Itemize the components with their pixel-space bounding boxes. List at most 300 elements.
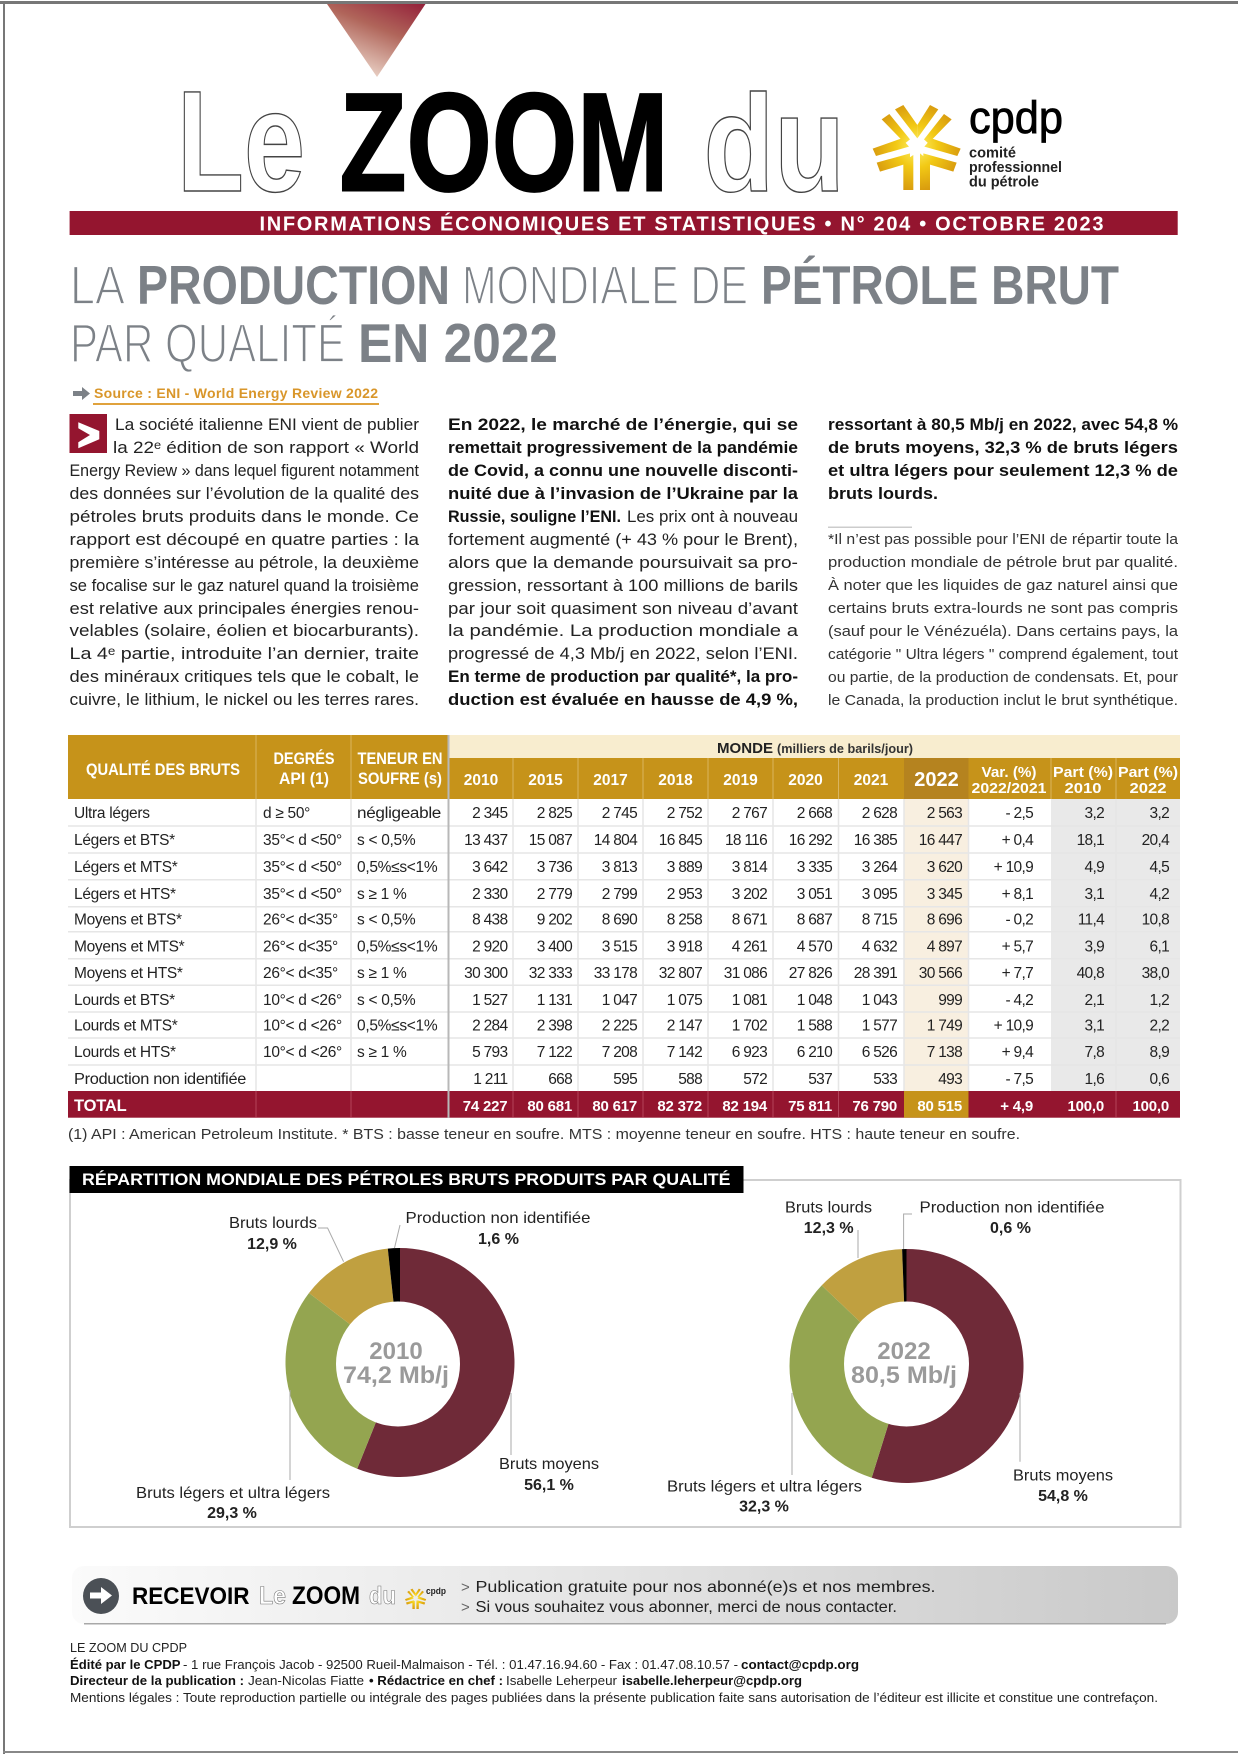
labels 2010: Bruts légers et ultra légers <box>136 1485 330 1502</box>
row: Légers et MTS <box>472 859 1169 876</box>
labels 2010: Bruts moyens <box>499 1456 599 1473</box>
row: Production non identifiée: - 7,5 <box>1005 1071 1033 1088</box>
row: Moyens et MTS: + 5,7 <box>1002 938 1033 956</box>
row: Légers et HTS: 3 095 <box>862 886 897 903</box>
row: Lourds et HTS: 6 526 <box>862 1044 897 1061</box>
footer: publication credits: contact@cpdp.org <box>741 1658 859 1672</box>
row: Production non identifiée: 572 <box>743 1071 767 1088</box>
row: Légers et BTS: 16 447 <box>919 832 962 849</box>
row: Lourds et MTS: 2 398 <box>537 1018 572 1034</box>
row: Légers et HTS <box>472 886 1169 903</box>
row: Légers et MTS: 3 620 <box>927 859 963 876</box>
row: Moyens et MTS: 4 897 <box>927 938 962 956</box>
chart: 2010 donut: 74,2 Mb/j <box>343 1362 449 1389</box>
row: Légers et HTS: 3 202 <box>732 886 767 903</box>
footnote: ou partie, de la production de condensats. Et, pour <box>828 670 1178 686</box>
row: Moyens et BTS: 11,4 <box>1078 912 1105 928</box>
row: Ultra légers: 2 752 <box>667 805 702 822</box>
row: Lourds et HTS: 6 923 <box>732 1044 767 1061</box>
row: Légers et HTS: 2 330 <box>472 886 508 903</box>
table header: Part (%) <box>1118 765 1178 781</box>
row: Production non identifiée: 1,6 <box>1085 1071 1104 1088</box>
row: Légers et HTS: 2 953 <box>667 886 702 903</box>
text column 2: fortement augmenté (+ 43 % pour le Brent), <box>448 531 798 549</box>
row: Moyens et BTS: 8 696 <box>927 912 962 928</box>
row: Production non identifiée: 588 <box>678 1071 702 1088</box>
subscription banner: Publication gratuite pour nos abonné(e)s et nos membres. <box>476 1579 936 1596</box>
text column 2: En terme de production par qualité*, la pro- <box>448 668 798 686</box>
row: Lourds et BTS: 1 527 <box>472 992 507 1009</box>
issue banner: INFORMATIONS ÉCONOMIQUES ET STATISTIQUES • N° 204 • OCTOBRE 2023 <box>260 212 1104 236</box>
row labels: Légers et BTS* <box>74 832 175 849</box>
row: TOTAL: 76 790 <box>852 1098 897 1115</box>
footnote: catégorie " Ultra légers " comprend également, tout <box>828 647 1178 663</box>
table band: MONDE <box>717 740 913 757</box>
row: Moyens et BTS: 8 687 <box>797 912 832 928</box>
row: Moyens et MTS <box>472 938 1169 956</box>
row: Moyens et HTS: 27 826 <box>789 965 832 982</box>
subscription banner <box>72 1566 1178 1624</box>
labels 2022: Production non identifiée <box>920 1200 1105 1217</box>
row: Lourds et BTS: 1 081 <box>732 992 767 1009</box>
labels 2022: 12,3 % <box>804 1220 854 1237</box>
panel: donut charts <box>70 1166 1180 1527</box>
labels 2010 <box>136 1210 599 1522</box>
table header: 2022 <box>914 769 959 791</box>
row: Production non identifiée: 533 <box>873 1071 897 1088</box>
row labels: s ≥ 1 % <box>357 1044 407 1061</box>
row: Légers et HTS: 3 051 <box>797 886 832 903</box>
row: Lourds et MTS: 1 702 <box>732 1018 767 1034</box>
row labels: 0,5%≤s<1% <box>357 1018 438 1034</box>
row: Moyens et HTS: 38,0 <box>1142 965 1170 982</box>
table header: API (1) <box>279 770 329 788</box>
row: Ultra légers <box>472 805 1169 822</box>
row: Légers et MTS: 3 264 <box>862 859 898 876</box>
table header: 2015 <box>528 772 563 789</box>
labels 2022: 32,3 % <box>739 1499 789 1516</box>
row: Moyens et BTS: 8 258 <box>667 912 702 928</box>
table header: QUALITÉ DES BRUTS <box>86 760 240 779</box>
row: TOTAL: 100,0 <box>1067 1098 1104 1115</box>
chart: 2022 donut: 2022 <box>877 1338 931 1365</box>
row: TOTAL <box>74 1097 1169 1115</box>
leader lines 2010 <box>290 1225 511 1480</box>
logo: cpdp <box>873 92 1063 191</box>
row: Légers et BTS <box>464 832 1170 849</box>
row: Moyens et BTS: 8 715 <box>862 912 897 928</box>
text column 3: de bruts moyens, 32,3 % de bruts légers <box>828 439 1178 457</box>
row: Lourds et HTS: 7 138 <box>927 1044 962 1061</box>
row labels: 35°< d <50° <box>263 886 342 903</box>
footnote: À noter que les liquides de gaz naturel ainsi que <box>828 577 1178 594</box>
row: Moyens et MTS: 4 632 <box>862 938 897 956</box>
footer: publication credits: Édité par le CPDP <box>70 1657 180 1672</box>
row: Moyens et BTS: 8 438 <box>472 912 507 928</box>
row: TOTAL: + 4,9 <box>1000 1098 1033 1115</box>
table header: Var. (%) <box>982 765 1037 781</box>
labels 2022: Bruts légers et ultra légers <box>667 1479 862 1496</box>
text column 1: est relative aux principales énergies renou- <box>70 600 419 618</box>
row: TOTAL: TOTAL <box>74 1097 127 1115</box>
chart: 2022 donut: 80,5 Mb/j <box>851 1362 957 1389</box>
text column 2: Les prix ont à nouveau <box>627 508 798 526</box>
table band: MONDE: MONDE <box>717 740 773 757</box>
row: Lourds et MTS: 2 225 <box>602 1018 637 1034</box>
row: Légers et MTS: 3 889 <box>667 859 702 876</box>
source line: Source : ENI - World Energy Review 2022 <box>94 385 378 401</box>
logo: cpdp: comité <box>969 144 1016 162</box>
table header: DEGRÉS <box>274 749 334 768</box>
row: Ultra légers: 2 668 <box>797 805 832 822</box>
masthead: Le ZOOM du <box>177 61 845 222</box>
panel heading <box>70 1166 744 1193</box>
row: Lourds et HTS: 7,8 <box>1085 1044 1104 1061</box>
row labels: 35°< d <50° <box>263 832 342 849</box>
row: Production non identifiée: 1 211 <box>473 1071 507 1088</box>
row: Lourds et HTS: + 9,4 <box>1002 1044 1034 1061</box>
subscription banner: Le <box>259 1582 286 1610</box>
table header: TENEUR EN <box>358 750 442 768</box>
row labels: s < 0,5% <box>357 832 416 849</box>
row labels: Moyens et HTS* <box>74 965 183 982</box>
row: Légers et BTS: 18,1 <box>1077 832 1104 849</box>
row: Lourds et HTS: 7 208 <box>602 1044 637 1061</box>
row: Moyens et HTS: 30 300 <box>464 965 508 982</box>
text column 1: velables (solaire, éolien et biocarburants). <box>70 622 419 640</box>
row: Légers et BTS: 13 437 <box>464 832 507 849</box>
row: Lourds et BTS: 1 131 <box>537 992 572 1009</box>
icon: small cpdp star <box>405 1589 426 1609</box>
subscription banner: cpdp <box>426 1586 446 1596</box>
row: TOTAL: 100,0 <box>1132 1098 1169 1115</box>
row: Ultra légers: - 2,5 <box>1005 805 1033 822</box>
headline: PÉTROLE BRUT <box>761 254 1119 316</box>
row: Lourds et BTS: 1 075 <box>667 992 702 1009</box>
text column 1: cuivre, le lithium, le nickel ou les terres rares. <box>70 691 419 709</box>
subscription banner: > <box>461 1599 470 1616</box>
row: Légers et MTS: 3 642 <box>472 859 507 876</box>
row: TOTAL: 75 811 <box>788 1098 832 1115</box>
text column 1: se focalise sur le gaz naturel quand la troisième <box>70 577 419 595</box>
footnote: (sauf pour le Vénézuéla). Dans certains pays, la <box>828 624 1179 640</box>
row labels: 35°< d <50° <box>263 859 342 876</box>
row labels: Moyens et BTS* <box>74 912 182 928</box>
row: Moyens et MTS: 3 515 <box>602 938 637 956</box>
row: Production non identifiée: 493 <box>938 1071 962 1088</box>
row: TOTAL: 82 372 <box>657 1098 702 1115</box>
text column 2: remettait progressivement de la pandémie <box>448 439 798 457</box>
headline: LA <box>70 254 125 316</box>
row: Ultra légers: 2 825 <box>537 805 572 822</box>
issue banner <box>70 211 1178 236</box>
row labels: 10°< d <26° <box>263 992 342 1009</box>
table header: 2022 <box>1130 781 1166 797</box>
row: Moyens et MTS: 3,9 <box>1085 938 1104 956</box>
row: Moyens et HTS: 31 086 <box>724 965 767 982</box>
row: Production non identifiée: 595 <box>613 1071 637 1088</box>
text column 1: rapport est découpé en quatre parties : la <box>70 531 420 549</box>
row: Lourds et BTS: 1 047 <box>602 992 637 1009</box>
text column 2: la pandémie. La production mondiale a <box>448 622 799 640</box>
footer: publication credits: - 1 rue François Jacob - 92500 Rueil-Malmaison - Tél. : 01.47.16.94.60 - Fax : 01.47.08.10.57 - <box>183 1658 738 1672</box>
row: Moyens et MTS: 6,1 <box>1150 938 1169 956</box>
row: Lourds et HTS: 5 793 <box>472 1044 507 1061</box>
row: Lourds et BTS: 1 043 <box>862 992 897 1009</box>
row labels: 26°< d<35° <box>263 965 338 982</box>
row: Légers et MTS: + 10,9 <box>994 859 1033 876</box>
row: Moyens et BTS: 9 202 <box>537 912 572 928</box>
footnote: certains bruts extra-lourds ne sont pas compris <box>828 601 1178 617</box>
decorative triangle <box>327 4 426 77</box>
footnote: *Il n’est pas possible pour l’ENI de répartir toute la <box>828 532 1179 548</box>
row: Ultra légers: 2 628 <box>862 805 897 822</box>
row: Moyens et HTS: 32 333 <box>529 965 572 982</box>
row: Légers et HTS: 2 779 <box>537 886 572 903</box>
row: Lourds et MTS: 1 588 <box>797 1018 832 1034</box>
labels 2010: Production non identifiée <box>406 1210 591 1227</box>
row: Production non identifiée: 0,6 <box>1150 1071 1169 1088</box>
row: Légers et MTS: 4,9 <box>1085 859 1104 876</box>
table header: 2022/2021 <box>972 781 1046 797</box>
chart: 2010 donut: 2010 <box>369 1338 423 1365</box>
labels 2010: Bruts lourds <box>229 1215 317 1232</box>
text column 2: progressé de 4,3 Mb/j en 2022, selon l’ENI. <box>448 645 798 663</box>
text column 2: duction est évaluée en hausse de 4,9 %, <box>448 691 798 709</box>
headline: MONDIALE DE <box>462 254 748 316</box>
row: TOTAL: 82 194 <box>722 1098 768 1115</box>
table header <box>86 749 1178 797</box>
row labels: s < 0,5% <box>357 992 416 1009</box>
row labels: s ≥ 1 % <box>357 965 407 982</box>
text column 2: gression, ressortant à 100 millions de barils <box>448 577 798 595</box>
row: Légers et BTS: 16 292 <box>789 832 832 849</box>
row: Lourds et HTS <box>472 1044 1169 1061</box>
labels 2010: 12,9 % <box>247 1236 297 1253</box>
table header: 2020 <box>788 772 823 789</box>
footnote: production mondiale de pétrole brut par qualité. <box>828 555 1178 571</box>
row: Ultra légers: 3,2 <box>1150 805 1169 822</box>
row labels: Production non identifiée <box>74 1071 246 1088</box>
row: Légers et BTS: 16 845 <box>659 832 702 849</box>
row: Légers et HTS: 3,1 <box>1085 886 1104 903</box>
masthead: Le ZOOM du: ZOOM <box>340 64 668 220</box>
logo: cpdp: du pétrole <box>969 174 1039 191</box>
table footnote: (1) API : American Petroleum Institute. * BTS : basse teneur en soufre. MTS : moyenne teneur en soufre. HTS : haute teneur en soufre. <box>68 1127 1020 1143</box>
subscription banner: du <box>369 1582 396 1610</box>
text column 2: de Covid, a connu une nouvelle disconti- <box>448 462 798 480</box>
text column 1: Energy Review » dans lequel figurent notamment <box>70 462 419 480</box>
text column 3 <box>828 416 1178 503</box>
text column 2: par jour soit quasiment son niveau d’avant <box>448 600 798 618</box>
row labels: Légers et HTS* <box>74 886 176 903</box>
text column 1: La société italienne ENI vient de publier <box>115 416 420 434</box>
row: Légers et BTS: + 0,4 <box>1002 832 1034 849</box>
text column 2 <box>448 416 799 709</box>
text column 3: et ultra légers pour seulement 12,3 % de <box>828 462 1178 480</box>
logo: cpdp: professionnel <box>969 159 1062 176</box>
row: Ultra légers: 2 767 <box>732 805 767 822</box>
footer: publication credits: isabelle.leherpeur@cpdp.org <box>622 1674 802 1688</box>
row: Moyens et BTS: - 0,2 <box>1005 912 1033 928</box>
row: Légers et MTS: 3 813 <box>602 859 637 876</box>
row labels: Moyens et MTS* <box>74 938 185 956</box>
icon: drop cap chevron <box>70 414 107 453</box>
text column 1 <box>70 414 420 709</box>
text column 1: la 22ᵉ édition de son rapport « World <box>113 439 419 457</box>
row: TOTAL: 80 617 <box>592 1098 637 1115</box>
subscription banner: ZOOM <box>292 1582 360 1610</box>
labels 2010: 1,6 % <box>478 1231 519 1248</box>
row: Légers et BTS: 16 385 <box>854 832 897 849</box>
row: Lourds et HTS: 7 142 <box>667 1044 702 1061</box>
row labels: 0,5%≤s<1% <box>357 859 438 876</box>
text column 3: bruts lourds. <box>828 485 938 503</box>
subscription banner: RECEVOIR <box>132 1583 250 1610</box>
row: Lourds et HTS: 6 210 <box>797 1044 833 1061</box>
row: Moyens et MTS: 4 261 <box>732 938 767 956</box>
masthead: Le ZOOM du: Le <box>177 61 305 222</box>
row: Moyens et MTS: 3 400 <box>537 938 573 956</box>
row: Lourds et MTS: 2,2 <box>1150 1018 1169 1034</box>
icon: arrow in circle <box>83 1578 119 1614</box>
footnote <box>828 526 1179 709</box>
table header: 2010 <box>1064 781 1102 797</box>
row labels <box>74 805 441 1088</box>
subscription banner: > <box>461 1579 470 1596</box>
chart: 2022 donut <box>790 1249 1024 1483</box>
row: Moyens et MTS: 3 918 <box>667 938 702 956</box>
row labels: Lourds et HTS* <box>74 1044 176 1061</box>
footnote: le Canada, la production inclut le brut synthétique. <box>828 693 1178 709</box>
row labels: s ≥ 1 % <box>357 886 407 903</box>
table header: 2018 <box>658 772 693 789</box>
labels 2022: 54,8 % <box>1038 1488 1088 1505</box>
headline: PAR QUALITÉ <box>70 312 345 374</box>
table header: 2021 <box>854 772 889 789</box>
row labels: d ≥ 50° <box>263 805 310 822</box>
leader lines 2022 <box>792 1214 1020 1475</box>
row: Moyens et BTS: 10,8 <box>1142 912 1169 928</box>
row: Moyens et HTS: 33 178 <box>594 965 637 982</box>
footer: publication credits: Jean-Nicolas Fiatte <box>248 1674 364 1688</box>
icon: grey arrow <box>73 387 90 400</box>
table header: 2017 <box>593 772 628 789</box>
row: Légers et HTS: 3 345 <box>927 886 962 903</box>
row: Lourds et MTS: 1 577 <box>862 1018 897 1034</box>
text column 1: des données sur l’évolution de la qualité des <box>70 485 419 503</box>
row labels: 26°< d<35° <box>263 938 338 956</box>
row: Moyens et MTS: 4 570 <box>797 938 833 956</box>
row: Ultra légers: 3,2 <box>1085 805 1104 822</box>
footer: publication credits: Isabelle Leherpeur <box>506 1674 617 1688</box>
table header: 2010 <box>464 772 498 789</box>
row: Légers et HTS: + 8,1 <box>1002 886 1033 903</box>
text column 1: La 4ᵉ partie, introduite l’an dernier, traite <box>70 645 419 663</box>
row: Moyens et BTS <box>472 912 1169 928</box>
row: Légers et BTS: 18 116 <box>725 832 767 849</box>
row: Production non identifiée: 668 <box>548 1071 572 1088</box>
text column 2: En 2022, le marché de l’énergie, qui se <box>448 416 798 434</box>
row: Lourds et BTS: 999 <box>938 992 962 1009</box>
text column 2: Russie, souligne l’ENI. <box>448 508 621 526</box>
row: Légers et BTS: 14 804 <box>594 832 638 849</box>
text column 1: des minéraux critiques tels que le cobalt, le <box>70 668 419 686</box>
table: world production by crude quality <box>68 735 1180 1118</box>
row: Légers et MTS: 3 736 <box>537 859 572 876</box>
row: TOTAL: 74 227 <box>463 1098 507 1115</box>
row: Légers et MTS: 3 335 <box>797 859 832 876</box>
headline: PRODUCTION <box>137 254 450 316</box>
row: Lourds et MTS: 3,1 <box>1085 1018 1104 1034</box>
row labels: 26°< d<35° <box>263 912 338 928</box>
row: TOTAL: 80 515 <box>917 1098 962 1115</box>
table header: 2019 <box>723 772 758 789</box>
row: Moyens et MTS: 2 920 <box>472 938 508 956</box>
row: Lourds et MTS: 1 749 <box>927 1018 962 1034</box>
row: Lourds et BTS: 1 048 <box>797 992 832 1009</box>
row: Production non identifiée: 537 <box>808 1071 832 1088</box>
row: Lourds et MTS: 2 147 <box>667 1018 702 1034</box>
row labels: Lourds et BTS* <box>74 992 175 1009</box>
row: Ultra légers: 2 345 <box>472 805 507 822</box>
labels 2010: 56,1 % <box>524 1477 574 1494</box>
row: Légers et HTS: 4,2 <box>1150 886 1169 903</box>
row: Légers et HTS: 2 799 <box>602 886 637 903</box>
row: Légers et MTS: 4,5 <box>1150 859 1169 876</box>
row: Lourds et MTS: 2 284 <box>472 1018 508 1034</box>
masthead: Le ZOOM du: du <box>704 67 845 221</box>
table header: Part (%) <box>1053 765 1113 781</box>
footer: publication credits: Directeur de la publication : <box>70 1674 244 1688</box>
footer: publication credits: LE ZOOM DU CPDP <box>70 1641 187 1655</box>
row: Moyens et BTS: 8 690 <box>602 912 638 928</box>
row labels: 10°< d <26° <box>263 1044 342 1061</box>
text column 3: ressortant à 80,5 Mb/j en 2022, avec 54,8 % <box>828 416 1178 434</box>
row: Moyens et HTS: + 7,7 <box>1002 965 1033 982</box>
icon: cpdp star <box>873 105 961 190</box>
chart: 2010 donut <box>285 1248 514 1477</box>
footer: publication credits: Mentions légales : Toute reproduction partielle ou intégrale des pages publiées dans la présente publication faite sans autorisation de l’éditeur est illicite et constitue une contrefaçon. <box>70 1691 1158 1705</box>
row labels: 10°< d <26° <box>263 1018 342 1034</box>
row: Moyens et BTS: 8 671 <box>732 912 767 928</box>
row: Production non identifiée <box>473 1071 1169 1088</box>
row: Lourds et BTS: 2,1 <box>1085 992 1104 1009</box>
row labels: Légers et MTS* <box>74 859 178 876</box>
labels 2022 <box>667 1200 1113 1516</box>
text column 1: première s’intéresse au pétrole, la deuxième <box>70 554 419 572</box>
row labels: Ultra légers <box>74 805 150 822</box>
row labels: s < 0,5% <box>357 912 416 928</box>
row: Légers et BTS: 20,4 <box>1142 832 1170 849</box>
row: Ultra légers: 2 563 <box>927 805 962 822</box>
row: Lourds et BTS <box>472 992 1169 1009</box>
row: Légers et MTS: 3 814 <box>732 859 768 876</box>
labels 2022: 0,6 % <box>990 1220 1031 1237</box>
row: Lourds et HTS: 8,9 <box>1150 1044 1169 1061</box>
logo: cpdp: cpdp <box>969 92 1063 143</box>
row: Moyens et HTS: 40,8 <box>1077 965 1104 982</box>
text column 1: pétroles bruts produits dans le monde. Ce <box>70 508 419 526</box>
text column 2: alors que la demande poursuivait sa pro- <box>448 554 798 572</box>
text column 2: nuité due à l’invasion de l’Ukraine par la <box>448 485 799 503</box>
panel heading: RÉPARTITION MONDIALE DES PÉTROLES BRUTS PRODUITS PAR QUALITÉ <box>82 1170 730 1189</box>
table header: SOUFRE (s) <box>358 770 442 788</box>
row: TOTAL: 80 681 <box>527 1098 572 1115</box>
row labels: Lourds et MTS* <box>74 1018 178 1034</box>
headline <box>70 254 1119 374</box>
footer: publication credits: • Rédactrice en chef : <box>369 1674 503 1688</box>
